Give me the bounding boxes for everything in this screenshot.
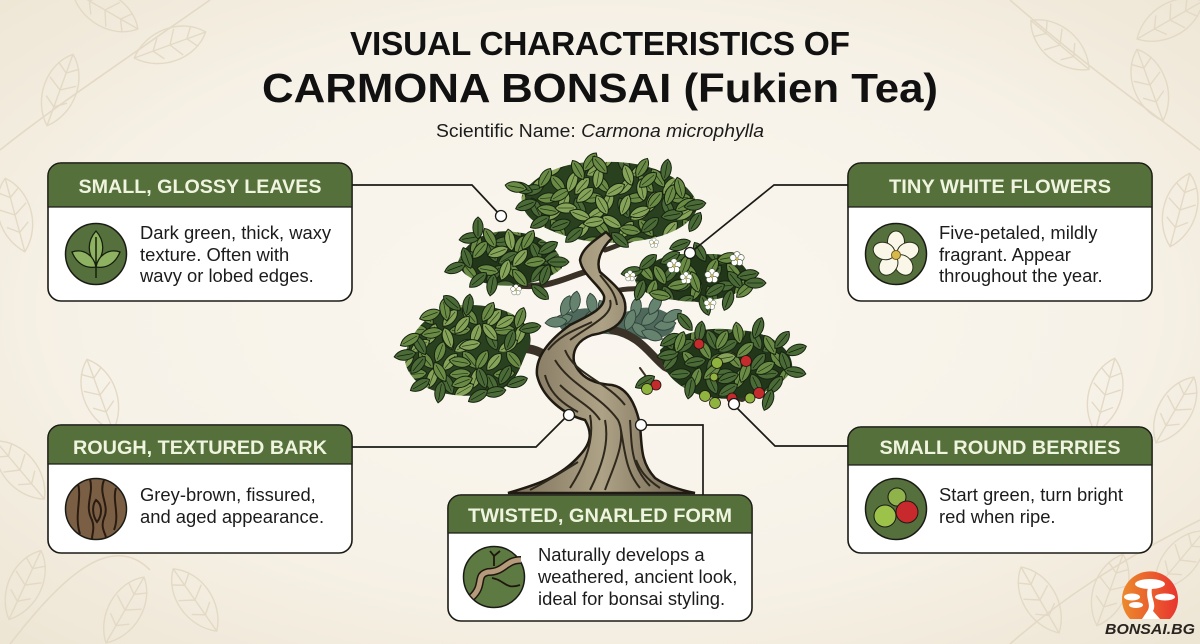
upper left canopy leaves (443, 217, 569, 303)
body text: Dark green, thick, waxy (140, 222, 332, 243)
body text: red when ripe. (939, 506, 1056, 527)
header (448, 495, 752, 533)
body text (537, 544, 737, 609)
icon: bark (66, 478, 126, 540)
upper right canopy leaves and flowers (511, 236, 766, 317)
body text: and aged appearance. (140, 506, 324, 527)
icon: gnarled branch (464, 546, 524, 608)
back foliage (545, 290, 684, 344)
branches (490, 205, 742, 398)
trunk (508, 232, 695, 493)
header (848, 427, 1152, 465)
body text: weathered, ancient look, (537, 566, 737, 587)
heading: ROUGH, TEXTURED BARK (73, 437, 327, 459)
header (48, 425, 352, 464)
body text (139, 222, 332, 286)
scientific name: Scientific Name: Carmona microphylla (436, 121, 764, 141)
heading: SMALL ROUND BERRIES (880, 437, 1120, 459)
body text: Five-petaled, mildly (939, 222, 1098, 243)
header (848, 163, 1152, 207)
panel: rough textured bark (48, 425, 352, 553)
panel: small round berries (848, 427, 1152, 553)
icon: berries (866, 478, 926, 540)
header (48, 163, 352, 207)
body text: Naturally develops a (538, 544, 705, 565)
lower right canopy leaves and berries (633, 310, 808, 412)
body text: fragrant. Appear (939, 244, 1071, 265)
heading: TWISTED, GNARLED FORM (468, 505, 732, 527)
icon: leaves (66, 224, 126, 284)
body text: Grey-brown, fissured, (140, 484, 316, 505)
body text: throughout the year. (939, 265, 1103, 286)
body text: wavy or lobed edges. (139, 265, 314, 286)
title (262, 26, 938, 141)
connector lines and markers (352, 185, 848, 495)
panel: twisted gnarled form (448, 495, 752, 621)
icon: flower (866, 224, 926, 284)
logo: Bonsai.bg (1105, 571, 1195, 638)
body text: texture. Often with (140, 244, 289, 265)
panel: small glossy leaves (48, 163, 352, 301)
logo: Bonsai.bg: BONSAI.BG (1105, 621, 1195, 638)
lower left canopy leaves (393, 292, 542, 406)
body text (939, 222, 1103, 286)
canopy blocks (405, 162, 792, 399)
body text (140, 484, 324, 527)
bonsai tree illustration (393, 150, 808, 493)
heading: SMALL, GLOSSY LEAVES (78, 176, 322, 198)
panel: tiny white flowers (848, 163, 1152, 301)
title: CARMONA BONSAI (Fukien Tea) (262, 65, 938, 111)
body text (939, 484, 1123, 527)
top canopy leaves (504, 150, 707, 251)
heading: TINY WHITE FLOWERS (889, 176, 1111, 198)
body text: ideal for bonsai styling. (538, 588, 725, 609)
title: VISUAL CHARACTERISTICS OF (350, 26, 850, 63)
body text: Start green, turn bright (939, 484, 1123, 505)
